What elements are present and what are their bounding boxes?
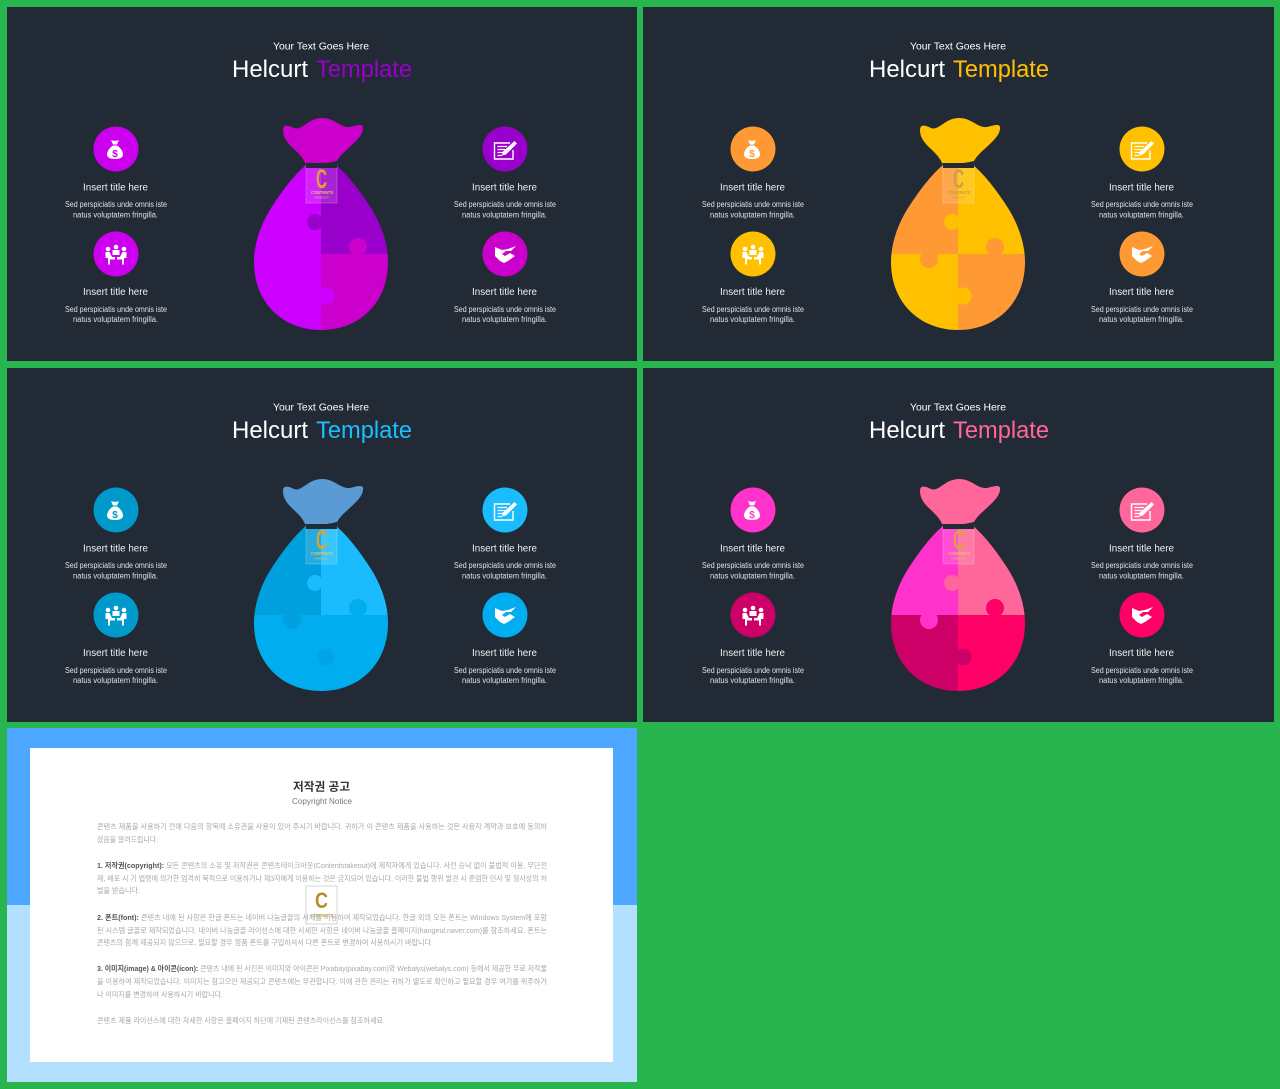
watermark — [306, 524, 337, 564]
item: top right — [454, 488, 556, 580]
item: top left: Sed perspiciatis unde omnis iste — [65, 561, 167, 570]
item: bottom right: Insert title here — [1109, 287, 1174, 298]
item: bottom right: natus voluptatem fringilla. — [1099, 315, 1184, 324]
heading: purple slide: Helcurt — [232, 56, 308, 83]
item: top left: natus voluptatem fringilla. — [73, 572, 158, 580]
item: top left: Sed perspiciatis unde omnis iste — [702, 200, 804, 209]
heading: purple slide: Template — [316, 56, 412, 83]
item: bottom left: Insert title here — [720, 287, 785, 298]
panel: purple slide — [7, 7, 637, 361]
text block: section 3 image and icon: 3. 이미지(image) & 아이콘(icon): 콘텐츠 내에 된 사진은 이미지와 아이콘은 Pixabay(pixabay.com)와 Webalys(webalys.com) 등에서 제공한 무료 저작물 — [97, 963, 547, 973]
heading: copyright notice: 저작권 공고 — [293, 780, 350, 794]
text block: section 3 image and icon: 나 이미지를 변경하여 사용하시기 바랍니다. — [97, 989, 223, 999]
chart: puzzle money bag blue — [250, 479, 392, 695]
item: top right: Sed perspiciatis unde omnis iste — [454, 561, 556, 570]
item: top left: $ — [112, 149, 118, 160]
heading: yellow slide — [869, 40, 1049, 83]
text block: intro: 셨음을 알려드립니다. — [97, 834, 158, 844]
panel: pink slide — [643, 368, 1274, 722]
item: top left: natus voluptatem fringilla. — [73, 210, 158, 220]
heading: pink slide: Template — [953, 417, 1049, 444]
watermark: C — [316, 525, 327, 555]
item: top right: Insert title here — [472, 544, 537, 554]
item: bottom right: Sed perspiciatis unde omnis iste — [454, 305, 556, 314]
item: top right: Insert title here — [472, 182, 537, 194]
item: bottom right: Insert title here — [472, 648, 537, 659]
heading: blue slide: Template — [316, 417, 412, 444]
heading: copyright notice — [292, 780, 353, 806]
item: bottom left — [65, 592, 167, 685]
text block: section 1 copyright: 벌을 받습니다. — [97, 885, 140, 895]
item: top left: Sed perspiciatis unde omnis iste — [702, 561, 804, 570]
item: top right: Insert title here — [1109, 544, 1174, 554]
heading: pink slide: Helcurt — [869, 417, 945, 444]
item: bottom right: natus voluptatem fringilla. — [1099, 676, 1184, 685]
text block: closing line: 콘텐츠 제품 라이선스에 대한 자세한 사항은 홈페이지 하단에 기재된 콘텐츠라이선스를 참조하세요. — [97, 1015, 385, 1025]
item: top right: natus voluptatem fringilla. — [462, 572, 547, 580]
item: bottom left: natus voluptatem fringilla. — [73, 676, 158, 685]
text block: section 3 image and icon: 을 이용하여 제작되었습니다. 이미지는 참고으만 제공되고 콘텐츠에는 무관합니다. 이에 관한 권리는 귀하가 별도로 확인하고 필요할 경우 여기를 위주하거 — [97, 976, 547, 986]
item: bottom right: Insert title here — [472, 287, 537, 298]
text block: section 3 image and icon — [97, 963, 547, 999]
item: top left — [65, 488, 167, 580]
item: bottom left — [702, 592, 804, 685]
item: bottom left: Sed perspiciatis unde omnis iste — [702, 305, 804, 314]
item: bottom right — [1091, 592, 1193, 685]
heading: blue slide: Your Text Goes Here — [273, 402, 369, 414]
item: bottom left: Sed perspiciatis unde omnis iste — [702, 666, 804, 675]
item: top left — [702, 488, 804, 580]
item: top right — [454, 126, 556, 220]
watermark: C — [315, 888, 328, 913]
item: bottom left: Insert title here — [83, 287, 148, 298]
watermark — [306, 886, 337, 924]
heading: blue slide: Helcurt — [232, 417, 308, 444]
item: bottom right: Sed perspiciatis unde omnis iste — [1091, 305, 1193, 314]
watermark: CONTENTS — [948, 551, 970, 556]
watermark: TAKEOUT — [314, 556, 329, 560]
chart: puzzle money bag yellow — [887, 118, 1029, 334]
heading: purple slide — [232, 40, 412, 83]
item: top right: natus voluptatem fringilla. — [462, 210, 547, 220]
item: top left: Insert title here — [720, 544, 785, 554]
watermark: CONTENTS — [311, 551, 333, 556]
watermark — [943, 524, 974, 564]
item: bottom left — [702, 232, 804, 324]
chart: puzzle money bag purple — [250, 118, 392, 334]
item: bottom left: Insert title here — [720, 648, 785, 659]
panel: yellow slide — [643, 7, 1274, 361]
heading: purple slide: Your Text Goes Here — [273, 40, 369, 52]
watermark: CONTENTS — [311, 913, 333, 918]
panel: copyright notice — [7, 728, 637, 1082]
item: bottom left: Sed perspiciatis unde omnis iste — [65, 305, 167, 314]
watermark: C — [316, 164, 327, 194]
item: bottom left: natus voluptatem fringilla. — [710, 676, 795, 685]
item: top left: Sed perspiciatis unde omnis iste — [65, 200, 167, 209]
item: bottom left: natus voluptatem fringilla. — [710, 315, 795, 324]
heading: pink slide — [869, 402, 1049, 444]
item: top right: Sed perspiciatis unde omnis iste — [1091, 200, 1193, 209]
heading: yellow slide: Your Text Goes Here — [910, 40, 1006, 52]
chart: puzzle money bag pink — [887, 479, 1029, 695]
item: bottom right — [1091, 232, 1193, 324]
text block: section 2 font: 2. 폰트(font): 콘텐츠 내에 된 사항은 한글 폰트는 네이버 나눔글꼴의 서체를 이용하여 제작되었습니다. 한글 외의 모든 폰트는 Windows System에 포함 — [97, 912, 547, 922]
watermark — [943, 163, 974, 203]
heading: yellow slide: Helcurt — [869, 56, 945, 83]
panel: blue slide — [7, 368, 637, 722]
heading: copyright notice: Copyright Notice — [292, 797, 353, 806]
text block: intro — [97, 821, 547, 844]
item: bottom right — [454, 232, 556, 324]
item: top left: Insert title here — [83, 182, 148, 194]
watermark: TAKEOUT — [314, 196, 329, 200]
item: bottom right — [454, 592, 556, 685]
item: bottom left: Insert title here — [83, 648, 148, 659]
watermark: CONTENTS — [948, 190, 970, 195]
item: bottom right: natus voluptatem fringilla. — [462, 676, 547, 685]
text block: intro: 콘텐츠 제품을 사용하기 전에 다음의 항목에 소유권을 사용이 있어 주시기 바랍니다. 귀하가 이 콘텐츠 제품을 사용하는 것은 사용자 계약과 보호에 동의하 — [97, 821, 547, 831]
item: top right — [1091, 126, 1193, 220]
text block: section 2 font: 콘텐츠의 함께 제공되지 않으므로, 필요할 경우 정품 폰트를 구입하셔서 다른 폰트로 변경하여 사용하시기 바랍니다. — [97, 937, 433, 947]
item: top left: $ — [749, 510, 755, 521]
item: top left — [702, 126, 804, 220]
text block: section 2 font: 된 시스템 글꼴로 제작되었습니다. 네이버 나눔글꼴 라이선스에 대한 사세한 사항은 네이버 나눔글꼴 홈페이지(hangeul.naver.com)를 참조하세요. 폰트는 — [97, 925, 547, 935]
item: bottom left: Sed perspiciatis unde omnis iste — [65, 666, 167, 675]
item: bottom left — [65, 232, 167, 324]
watermark: C — [953, 164, 964, 194]
item: top right: Sed perspiciatis unde omnis iste — [454, 200, 556, 209]
heading: pink slide: Your Text Goes Here — [910, 402, 1006, 414]
watermark: TAKEOUT — [951, 196, 966, 200]
heading: blue slide — [232, 402, 412, 444]
heading: yellow slide: Template — [953, 56, 1049, 83]
text block: section 1 copyright — [97, 860, 547, 895]
item: bottom right: natus voluptatem fringilla. — [462, 315, 547, 324]
item: top left: natus voluptatem fringilla. — [710, 572, 795, 580]
item: bottom left: natus voluptatem fringilla. — [73, 315, 158, 324]
watermark: TAKEOUT — [951, 556, 966, 560]
item: top left: Insert title here — [720, 182, 785, 194]
text block: section 1 copyright: 1. 저작권(copyright): 모든 콘텐츠의 소유 및 저작권은 콘텐츠테이크아웃(Contentstakeout)에 제작자에게 있습니다. 사전 승낙 없이 불법적 이용, 무단전 — [97, 860, 547, 870]
watermark: CONTENTS — [311, 190, 333, 195]
item: top right: Sed perspiciatis unde omnis iste — [1091, 561, 1193, 570]
watermark — [306, 163, 337, 203]
item: top right: natus voluptatem fringilla. — [1099, 210, 1184, 220]
item: bottom right: Sed perspiciatis unde omnis iste — [1091, 666, 1193, 675]
item: bottom right: Sed perspiciatis unde omnis iste — [454, 666, 556, 675]
text block: section 1 copyright: 재, 배포 시 기 법령에 의거한 엄격히 목적으로 이용하거나 제3자에게 이용하는 것은 금지되어 있습니다. 이러한 불법 행위 발견 시 준엄한 민사 및 형사상의 처 — [97, 873, 547, 883]
item: top left: $ — [112, 510, 118, 521]
item: top left: $ — [749, 149, 755, 160]
item: bottom right: Insert title here — [1109, 648, 1174, 659]
item: top right: natus voluptatem fringilla. — [1099, 572, 1184, 580]
watermark: C — [953, 525, 964, 555]
item: top right: Insert title here — [1109, 182, 1174, 194]
item: top left — [65, 126, 167, 220]
item: top right — [1091, 488, 1193, 580]
item: top left: Insert title here — [83, 544, 148, 554]
text block: section 2 font — [97, 912, 547, 947]
item: top left: natus voluptatem fringilla. — [710, 210, 795, 220]
